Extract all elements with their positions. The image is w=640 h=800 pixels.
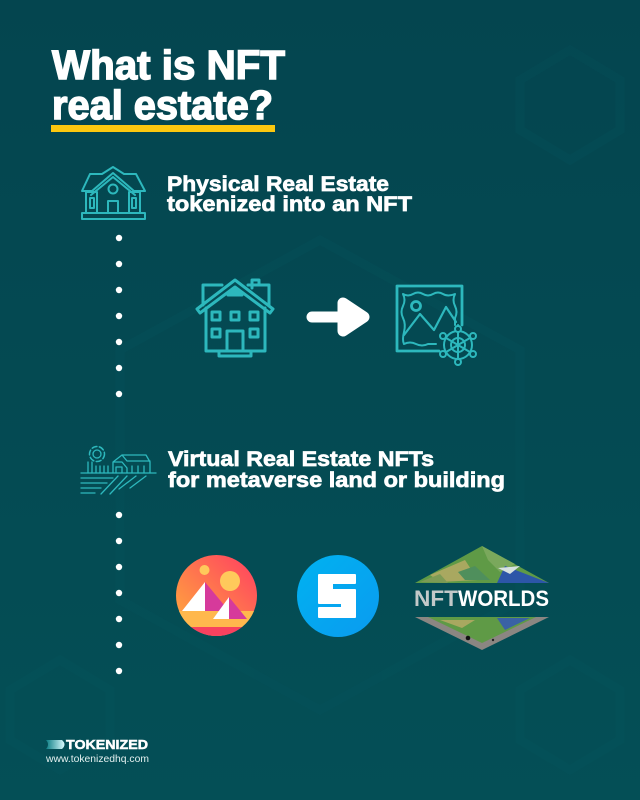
heading: physical real estate: tokenized into an NFT — [167, 192, 412, 216]
heading: physical real estate — [167, 172, 412, 216]
dotted line: first — [116, 235, 122, 397]
title: What is NFT — [52, 42, 285, 88]
logo: NFT Worlds — [414, 546, 549, 650]
heading: virtual real estate: Virtual Real Estate NFTs — [168, 447, 434, 471]
heading: virtual real estate — [168, 447, 505, 492]
logo: The Sandbox — [297, 555, 379, 637]
dotted line: second — [116, 512, 122, 674]
title — [52, 42, 285, 128]
arrow — [312, 303, 364, 331]
icon: farm land — [81, 446, 156, 494]
icon: house — [197, 280, 273, 356]
heading: physical real estate: Physical Real Estate — [167, 172, 389, 196]
logo: Tokenized: TOKENIZED — [66, 737, 148, 752]
logo: NFT Worlds: WORLDS — [458, 586, 549, 611]
website url: www.tokenizedhq.com — [45, 754, 149, 765]
title: real estate? — [52, 82, 273, 128]
icon: mansion — [82, 167, 145, 219]
logo: Decentraland — [176, 555, 257, 636]
logo: NFT Worlds: NFT — [414, 586, 459, 611]
icon: NFT image with network — [397, 286, 476, 365]
heading: virtual real estate: for metaverse land or building — [168, 468, 505, 492]
title underline — [51, 125, 275, 132]
